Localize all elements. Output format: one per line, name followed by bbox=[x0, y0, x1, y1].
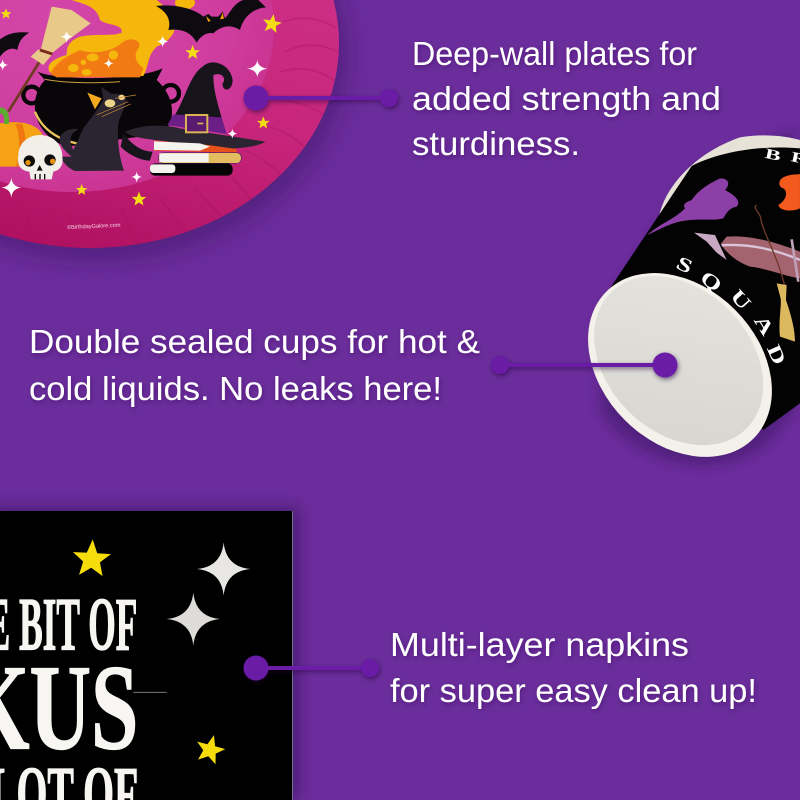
copyright text: ©BirthdayGalore.com bbox=[67, 222, 121, 231]
icon: sparkle upper bbox=[197, 542, 250, 596]
icon: yellow brew bbox=[49, 0, 195, 77]
cup rim bbox=[659, 135, 800, 220]
icon: sparkle lower bbox=[167, 592, 220, 646]
icon: pumpkin bbox=[0, 107, 43, 167]
connector: napkin callout bbox=[244, 656, 379, 680]
illustration: witch scene bbox=[0, 0, 283, 206]
cup lettering: S bbox=[673, 252, 696, 278]
cup lettering: Q bbox=[696, 267, 726, 297]
text: plates caption bbox=[412, 35, 721, 162]
icon: witch hat bbox=[125, 62, 265, 149]
text: plates caption: sturdiness. bbox=[412, 125, 580, 162]
icon: pink arm bbox=[694, 233, 800, 282]
icon: cauldron bbox=[23, 68, 179, 147]
icon: purple ghost bbox=[647, 178, 738, 235]
icon: orange hair bbox=[778, 174, 800, 211]
cup lettering: A bbox=[749, 312, 778, 340]
icon: top bat bbox=[156, 0, 266, 43]
napkin lettering bbox=[0, 584, 138, 800]
icon: sparkles bbox=[0, 31, 268, 198]
text: plates caption: added strength and bbox=[412, 80, 721, 117]
connector: cup callout bbox=[491, 352, 678, 378]
icon: stack of books bbox=[150, 141, 241, 176]
icon: yellow star small bbox=[197, 735, 226, 764]
icon: black cat bbox=[60, 87, 153, 171]
panel: napkin bbox=[0, 506, 300, 800]
cup lettering bbox=[673, 146, 800, 368]
text: cups caption bbox=[29, 323, 480, 407]
icon: left bat bbox=[0, 32, 29, 57]
panel: paper plate bbox=[0, 0, 346, 260]
cup lettering: B bbox=[763, 146, 782, 165]
icon: stars bbox=[1, 8, 283, 206]
connector: plate callout bbox=[244, 86, 398, 110]
cup wall bbox=[600, 147, 800, 430]
text: napkins caption bbox=[390, 626, 757, 709]
cup lettering: D bbox=[762, 342, 790, 368]
icon: yellow star large bbox=[72, 538, 112, 576]
icon: skull bbox=[18, 135, 63, 179]
text: cups caption: Double sealed cups for hot & bbox=[29, 323, 480, 360]
icon: tassel broom bbox=[755, 205, 795, 342]
text: napkins caption: Multi-layer napkins bbox=[390, 626, 689, 663]
text: cups caption: cold liquids. No leaks here! bbox=[29, 370, 442, 407]
text: plates caption: Deep-wall plates for bbox=[412, 35, 697, 72]
panel: paper cup bbox=[551, 130, 800, 494]
text: napkins caption: for super easy clean up! bbox=[390, 672, 757, 709]
cup base bbox=[551, 236, 800, 494]
cup lettering: U bbox=[726, 286, 755, 315]
icon: broom bbox=[8, 7, 91, 112]
